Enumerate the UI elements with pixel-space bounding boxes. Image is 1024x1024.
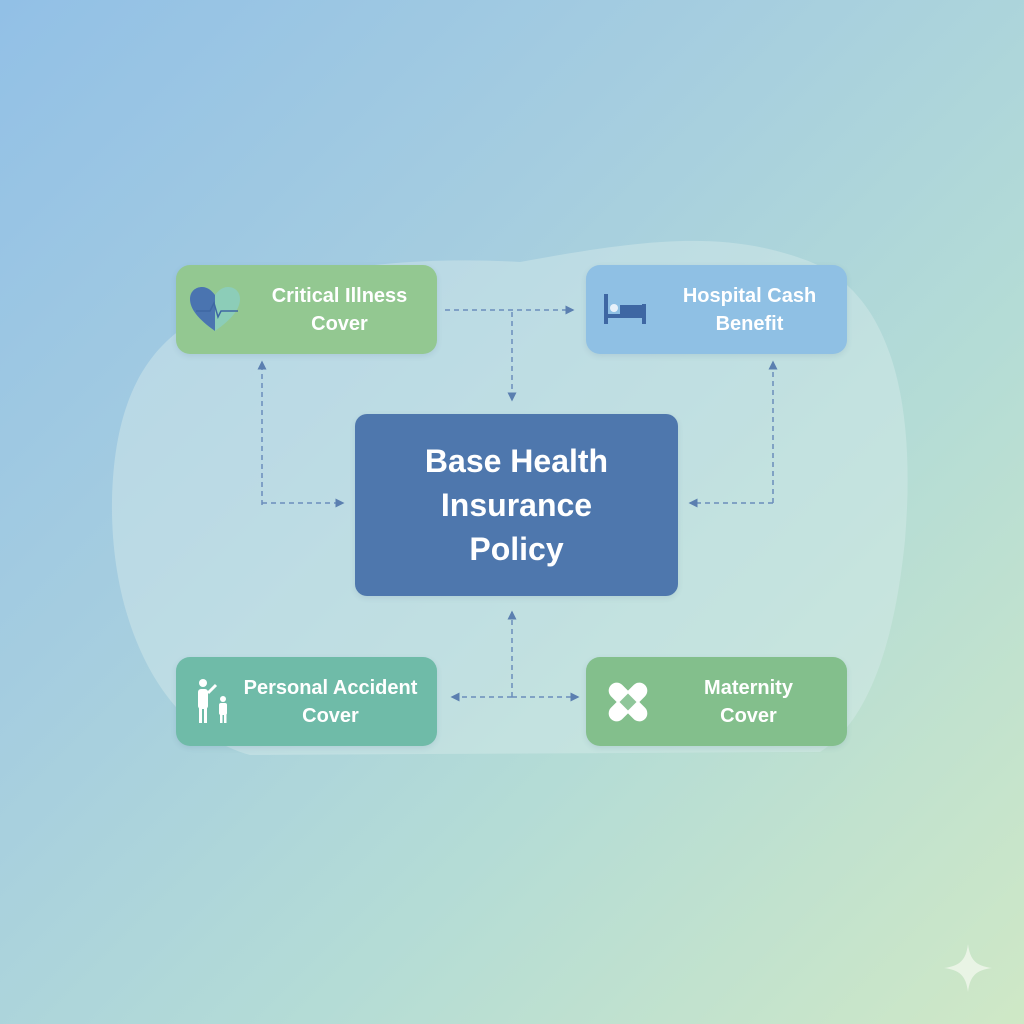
panel: maternity — [586, 657, 847, 746]
panel: personal accident: Cover — [302, 704, 359, 726]
panel: critical illness: Critical Illness — [272, 284, 407, 306]
panel: maternity: Maternity — [704, 676, 793, 698]
panel: base policy — [355, 414, 678, 596]
panel: maternity: Cover — [720, 704, 777, 726]
icon: bed — [604, 294, 646, 324]
panel: base policy: Insurance — [441, 487, 592, 523]
panel: personal accident — [176, 657, 437, 746]
panel: critical illness — [176, 265, 437, 354]
icon: people — [198, 679, 227, 723]
panel: hospital cash — [586, 265, 847, 354]
panel: base policy: Policy — [469, 531, 564, 567]
panel: base policy: Base Health — [425, 443, 608, 479]
panel: hospital cash: Benefit — [716, 312, 783, 334]
panel: personal accident: Personal Accident — [244, 676, 417, 698]
icon: heart — [190, 287, 240, 331]
panel: hospital cash: Hospital Cash — [683, 284, 816, 306]
icon: bandage — [608, 682, 648, 722]
panel: critical illness: Cover — [311, 312, 368, 334]
icon: sparkle — [945, 945, 991, 991]
